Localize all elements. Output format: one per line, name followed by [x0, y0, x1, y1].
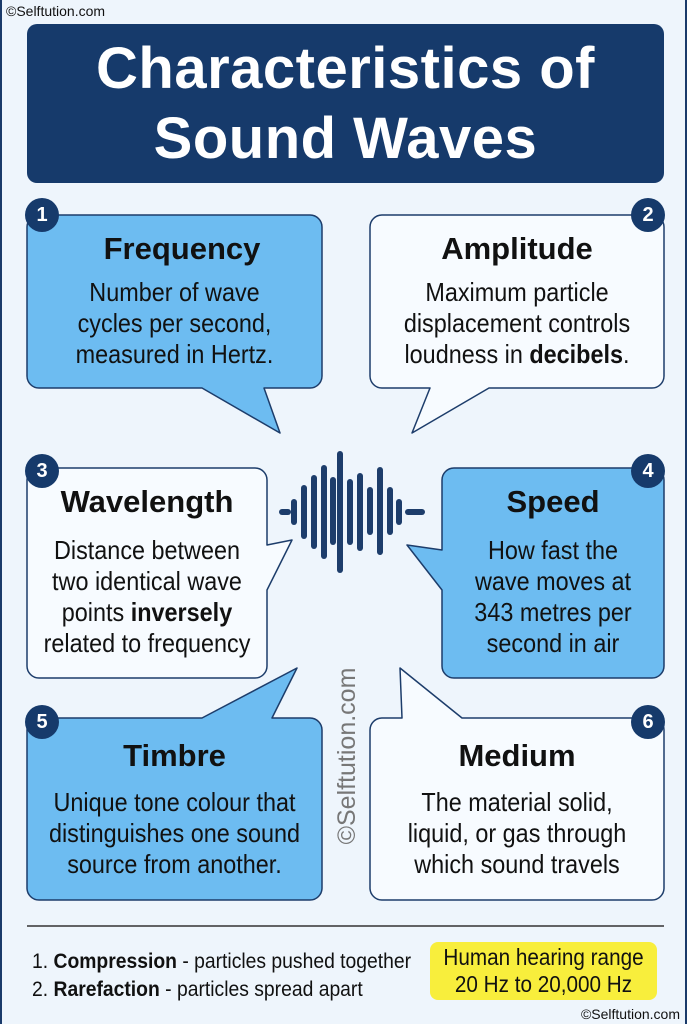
- panel: amplitude: displacement controls: [404, 308, 630, 338]
- panel: speed: [474, 454, 665, 658]
- panel: wavelength: Distance between: [54, 535, 240, 565]
- vertical watermark: ©Selftution.com: [333, 668, 361, 844]
- panel: frequency: Frequency: [104, 231, 260, 266]
- panel: timbre: distinguishes one sound: [49, 818, 300, 848]
- panel: speed: second in air: [487, 628, 619, 658]
- panel: frequency: measured in Hertz.: [76, 339, 273, 369]
- icon: sound waveform: [279, 451, 425, 573]
- panel: wavelength: two identical wave: [52, 566, 242, 596]
- callout: hearing range: [430, 942, 657, 1000]
- panel: medium: liquid, or gas through: [408, 818, 626, 848]
- panel: frequency: 1: [36, 204, 48, 226]
- panel: medium: 6: [642, 711, 654, 733]
- footer list: 1. Compression - particles pushed together: [32, 950, 411, 973]
- callout: hearing range: 20 Hz to 20,000 Hz: [455, 971, 632, 997]
- panel: speed: How fast the: [488, 535, 618, 565]
- panel: timbre: Unique tone colour that: [54, 787, 295, 817]
- panel: wavelength: points inversely: [62, 597, 232, 627]
- title: Characteristics of: [96, 36, 595, 101]
- panel: medium: The material solid,: [421, 787, 613, 817]
- panel: speed: 4: [642, 460, 654, 482]
- panel: frequency: [25, 198, 273, 369]
- panel: medium: which sound travels: [414, 849, 620, 879]
- panel: amplitude: Maximum particle: [425, 277, 609, 307]
- panel: amplitude: loudness in decibels.: [404, 339, 630, 369]
- panel: wavelength: [25, 454, 250, 658]
- callout: hearing range: Human hearing range: [443, 944, 644, 970]
- panel: frequency: cycles per second,: [78, 308, 271, 338]
- panel: amplitude: 2: [642, 204, 654, 226]
- panel: timbre: Timbre: [123, 738, 226, 773]
- panel: wavelength: 3: [36, 460, 48, 482]
- panel: timbre: source from another.: [67, 849, 282, 879]
- footer list: [32, 950, 411, 1001]
- panel: wavelength: related to frequency: [44, 628, 250, 658]
- panel: timbre: 5: [36, 711, 48, 733]
- watermark top-left: ©Selftution.com: [6, 3, 105, 19]
- watermark bottom-right: ©Selftution.com: [581, 1006, 680, 1022]
- panel: speed: 343 metres per: [474, 597, 632, 627]
- panel: frequency: Number of wave: [89, 277, 260, 307]
- title: Sound Waves: [154, 106, 537, 171]
- panel: speed: Speed: [506, 484, 600, 519]
- panel: speed: wave moves at: [475, 566, 631, 596]
- panel: medium: [408, 705, 665, 879]
- footer list: 2. Rarefaction - particles spread apart: [32, 978, 363, 1001]
- panel: amplitude: [404, 198, 665, 369]
- panel: amplitude: Amplitude: [441, 231, 593, 266]
- panel: medium: Medium: [458, 738, 576, 773]
- title: [27, 24, 664, 183]
- panel: timbre: [25, 705, 300, 879]
- panel: wavelength: Wavelength: [61, 484, 233, 519]
